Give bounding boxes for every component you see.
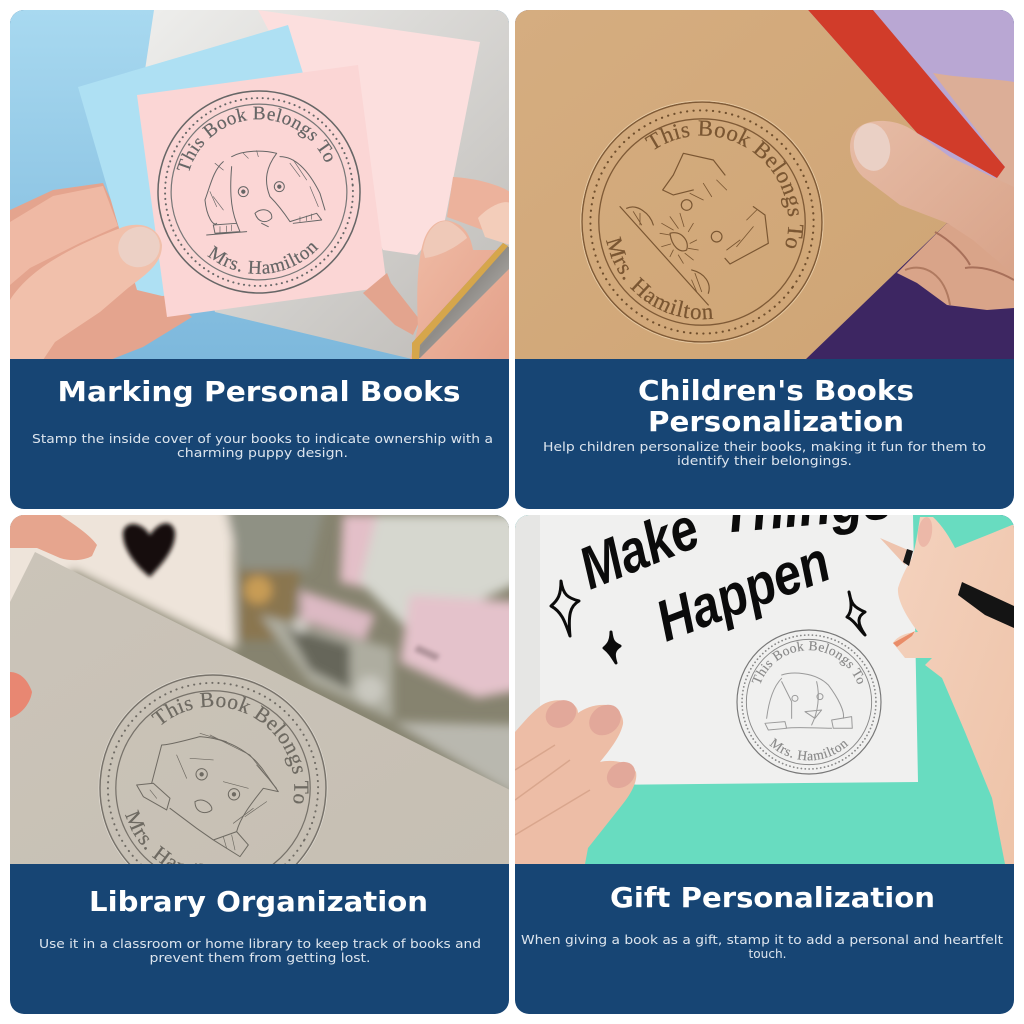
kraft cover [515,10,947,360]
stamp impression [157,90,361,294]
caption: marking personal books [32,375,493,460]
stamp impression: This Book Belongs To [151,692,309,804]
photo: grey card on blurred background [10,515,509,864]
description: Stamp the inside cover of your books to indicate ownership with a [32,431,493,446]
description: identify their belongings. [677,453,852,468]
stamp impression: Mrs. Hamilton [125,810,204,864]
right hand [893,516,1014,864]
hand lettering: Happen [647,529,839,654]
puppy illustration [137,733,278,857]
gold pen [412,243,510,359]
black pen [903,549,1014,628]
stamp impression: Mrs. Hamilton [769,738,848,760]
panel: library organization [10,515,509,1014]
stamp impression: This Book Belongs To [176,106,333,171]
hand lettering: Make [570,494,708,602]
stamp impression [580,100,824,344]
thumb and fingers [850,120,1014,310]
description: Help children personalize their books, making it fun for them to [543,439,986,454]
photo: white page on teal with hands [515,515,1014,864]
heading: Gift Personalization [610,881,935,914]
pen tip [880,538,908,565]
card [10,552,510,864]
hand lettering: Things [717,464,894,546]
panel: marking personal books [10,10,509,509]
stamp impression [736,629,882,775]
back of hand behind book [933,73,1014,187]
red book edge [808,10,1005,178]
description: touch. [748,946,786,961]
stamp impression: Mrs. Hamilton [606,236,714,320]
photo: pink and blue notes with hands [10,10,509,359]
puppy illustration [765,673,852,730]
fingers behind notes [10,183,192,360]
stamp impression: This Book Belongs To [644,120,804,248]
heading: Children's Books [638,374,914,407]
heading: Marking Personal Books [58,375,460,408]
description: Use it in a classroom or home library to keep track of books and [39,936,481,951]
left hand [515,695,640,864]
finger top left [10,515,97,560]
stamp impression [98,674,328,864]
puppy illustration [620,153,768,305]
caption: gift personalization [521,881,1003,961]
right hand [363,177,510,360]
panel: gift personalization [515,515,1014,1014]
heading: Personalization [648,405,904,438]
description: When giving a book as a gift, stamp it to add a personal and heartfelt [521,932,1003,947]
photo: kraft book cover with hand [515,10,1014,359]
stamp impression: This Book Belongs To [752,641,864,684]
finger left [10,672,32,718]
heading: Library Organization [89,885,428,918]
description: charming puppy design. [177,445,348,460]
stamp impression: Mrs. Hamilton [207,243,318,274]
panel: children's books personalization [515,10,1014,509]
left thumb [10,219,167,360]
caption: library organization [39,885,481,965]
caption: children's books personalization [543,374,986,468]
hand lettering [581,515,888,642]
description: prevent them from getting lost. [150,950,370,965]
puppy illustration [205,151,325,235]
sparkles [551,581,865,663]
